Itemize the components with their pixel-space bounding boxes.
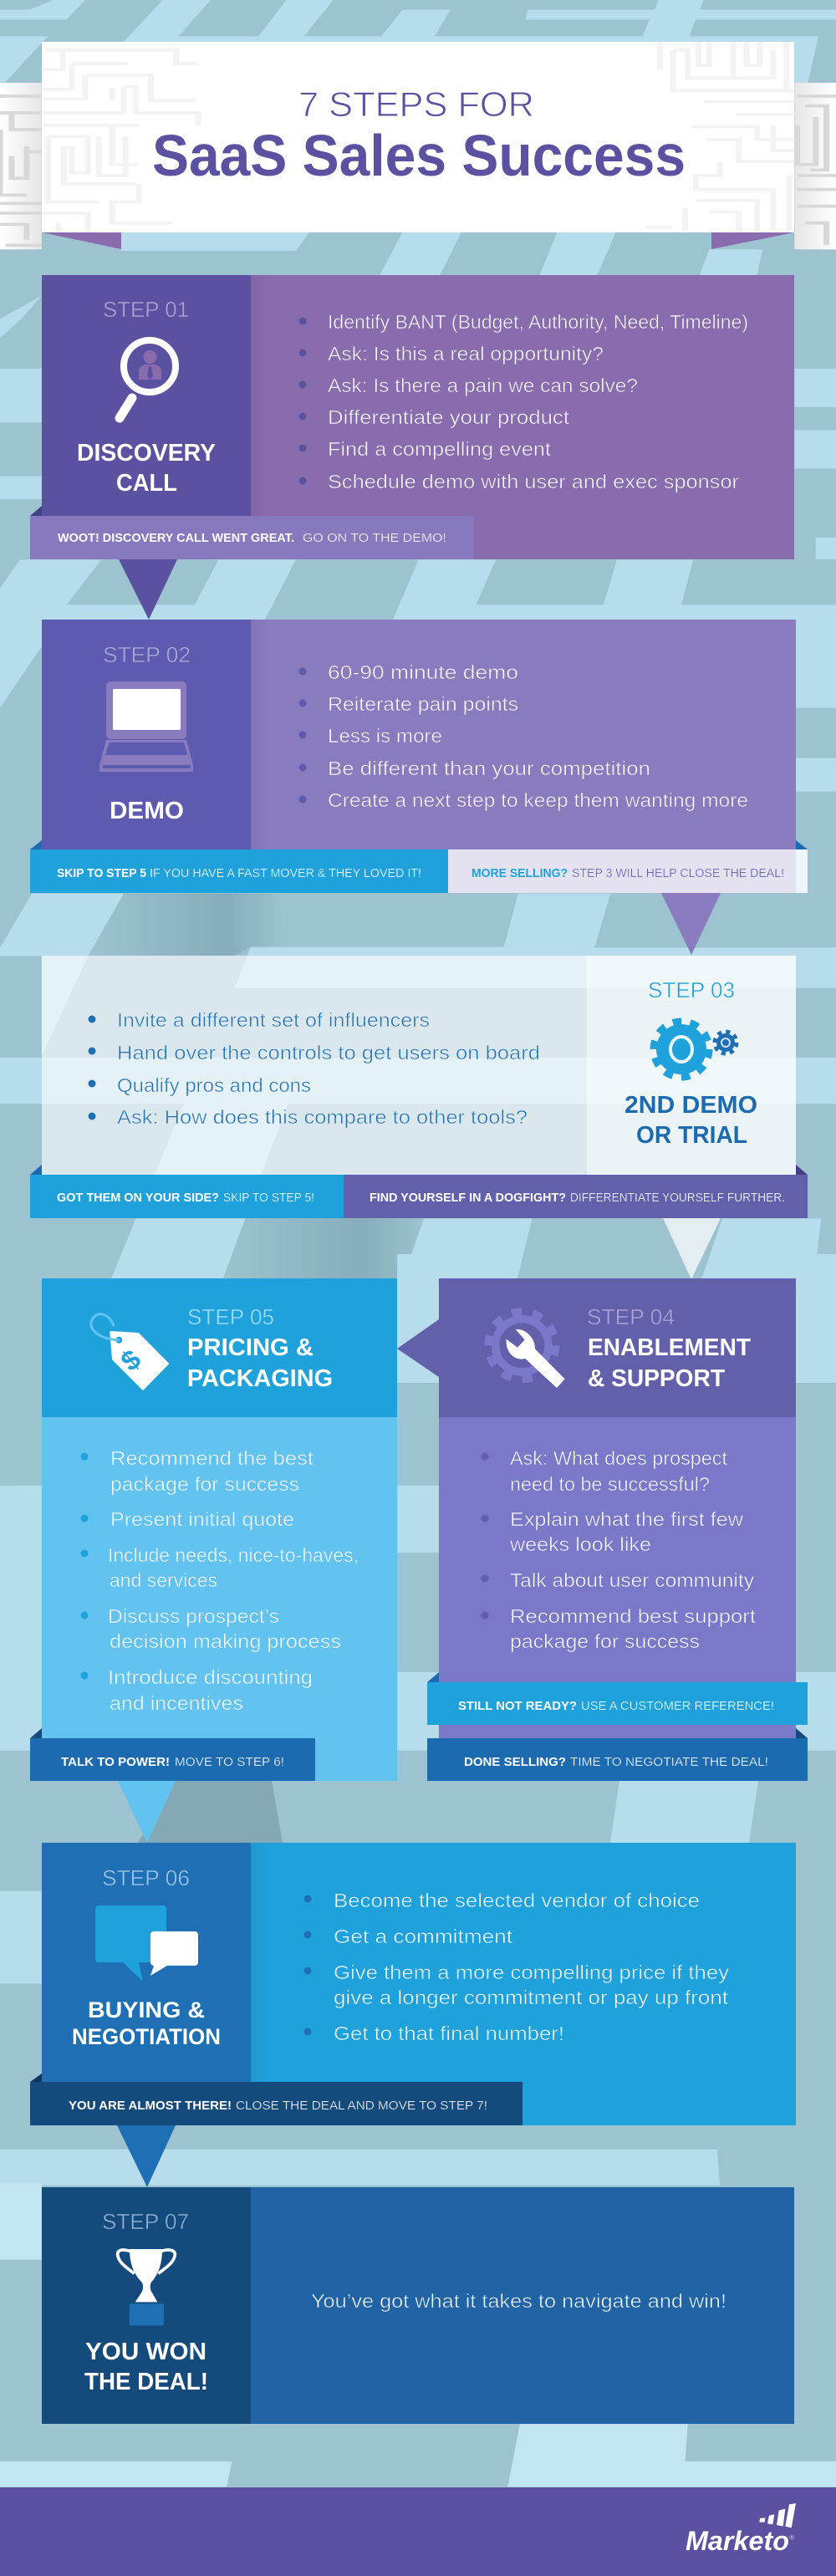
bullet list: Introduce discounting: [108, 1666, 313, 1688]
bullet list: Ask: How does this compare to other tools?: [117, 1106, 528, 1128]
arrow: step 4 to step 5: [397, 1319, 439, 1377]
bullet list: Find a compelling event: [328, 438, 552, 460]
bullet list: Explain what the first few: [510, 1508, 743, 1530]
bullet list: [299, 311, 748, 492]
banner: [30, 506, 474, 559]
logo: Marketo: Marketo: [686, 2526, 789, 2556]
heading: BUYING &: [88, 1997, 205, 2023]
header maze pattern: [42, 42, 794, 232]
closing text: You’ve got what it takes to navigate and win!: [311, 2290, 726, 2312]
banner: [30, 2074, 522, 2125]
banner: talk to power: TALK TO POWER!: [61, 1755, 170, 1769]
panel: step 06 buying and negotiation: [30, 1843, 796, 2125]
banner: got them on your side: GOT THEM ON YOUR SIDE?: [57, 1191, 219, 1205]
icon: price tag: $: [115, 1344, 147, 1378]
icon: magnifying glass with person: [120, 340, 176, 418]
banner: done selling: DONE SELLING?: [464, 1755, 566, 1769]
bullet list: 60-90 minute demo: [328, 661, 518, 683]
bullet list: Get to that final number!: [334, 2023, 564, 2044]
bullet list: and incentives: [110, 1692, 243, 1714]
region around steps 4 and 5: [0, 1254, 836, 1751]
heading: DEMO: [110, 798, 184, 824]
banner: talk to power: MOVE TO STEP 6!: [175, 1755, 284, 1769]
step label: STEP 05: [187, 1304, 274, 1329]
heading: PRICING &: [187, 1334, 314, 1361]
bullet list: [304, 1890, 730, 2044]
bullet list: [80, 1447, 359, 1714]
banner: still not ready: [427, 1672, 808, 1725]
ribbon fold left: [42, 232, 121, 249]
logo: Marketo: ®: [789, 2533, 794, 2541]
title line 1: 7 STEPS FOR: [298, 84, 534, 124]
step label: STEP 06: [102, 1865, 190, 1890]
bullet list: package for success: [510, 1630, 700, 1652]
icon: speech bubbles: [95, 1905, 198, 1982]
icon: wrench and gear: [488, 1312, 565, 1388]
banner: talk to power: [30, 1728, 315, 1781]
panel: step 04 enablement and support: [427, 1278, 808, 1781]
bullet list: Schedule demo with user and exec sponsor: [328, 471, 739, 492]
icon: laptop: [99, 681, 193, 772]
banner: skip to step 5: [30, 840, 448, 893]
step label: STEP 01: [103, 297, 189, 322]
step label: STEP 03: [648, 977, 735, 1002]
panel: step 05 pricing and packaging: [30, 1278, 397, 1781]
panel: step 01 discovery call: CALL: [116, 470, 177, 497]
bullet list: Less is more: [328, 725, 442, 747]
bullet list: Invite a different set of influencers: [117, 1009, 430, 1031]
banner: still not ready: USE A CUSTOMER REFERENCE!: [581, 1699, 774, 1713]
banner: more selling: [448, 840, 808, 893]
step label: STEP 02: [103, 642, 191, 667]
banner: done selling: TIME TO NEGOTIATE THE DEAL!: [570, 1755, 768, 1769]
bullet list: Recommend best support: [510, 1605, 757, 1627]
banner: done selling: [427, 1728, 808, 1781]
bullet list: [89, 1009, 540, 1128]
arrow: step 2 to step 3: [661, 893, 721, 955]
banner: more selling: MORE SELLING?: [472, 866, 568, 880]
panel: step 07 you won the deal: [42, 2187, 794, 2424]
step label: STEP 07: [102, 2209, 189, 2234]
bullet list: Differentiate your product: [328, 406, 570, 428]
panel: step 03 second demo or trial: [30, 956, 808, 1218]
banner: CLOSE THE DEAL AND MOVE TO STEP 7!: [236, 2099, 487, 2113]
arrow: step 1 to step 2: [119, 559, 177, 620]
bullet list: [482, 1447, 757, 1652]
banner: YOU ARE ALMOST THERE!: [69, 2099, 232, 2113]
banner: GO ON TO THE DEMO!: [303, 531, 446, 545]
bullet list: Include needs, nice-to-haves,: [108, 1544, 359, 1566]
banner: dogfight: FIND YOURSELF IN A DOGFIGHT?: [370, 1191, 566, 1205]
header panel: [42, 42, 794, 232]
panel: step 01 discovery call: [30, 275, 794, 559]
panel: step 02 demo: [30, 620, 808, 893]
banner: got them on your side: [30, 1165, 344, 1218]
bullet list: and services: [110, 1569, 217, 1591]
icon: trophy: [118, 2249, 175, 2325]
region around steps 6 and 7: [0, 1891, 836, 2487]
heading: DISCOVERY: [77, 440, 216, 467]
banner: still not ready: STILL NOT READY?: [458, 1699, 577, 1713]
bullet list: Recommend the best: [110, 1447, 314, 1469]
heading: 2ND DEMO: [624, 1092, 757, 1119]
arrow: step 6 to step 7: [117, 2125, 176, 2187]
logo: Marketo: [686, 2503, 796, 2556]
step label: STEP 04: [587, 1304, 675, 1329]
arrow: step 3 to step 4: [663, 1218, 721, 1279]
bullet list: [299, 661, 748, 811]
bullet list: Get a commitment: [334, 1926, 513, 1947]
banner: skip to step 5: SKIP TO STEP 5: [57, 866, 146, 880]
panel: step 04 enablement and support: & SUPPORT: [588, 1365, 725, 1392]
banner: WOOT! DISCOVERY CALL WENT GREAT.: [58, 531, 294, 545]
bullet list: Hand over the controls to get users on board: [117, 1042, 540, 1064]
panel: step 06 buying and negotiation: NEGOTIATION: [72, 2024, 221, 2049]
bullet list: Talk about user community: [510, 1569, 755, 1591]
bullet list: need to be successful?: [510, 1473, 710, 1495]
bullet list: Ask: Is this a real opportunity?: [328, 343, 604, 365]
bullet list: Ask: What does prospect: [510, 1447, 728, 1469]
bullet list: Qualify pros and cons: [117, 1074, 311, 1096]
bullet list: Reiterate pain points: [328, 693, 518, 715]
bullet list: Become the selected vendor of choice: [334, 1890, 700, 1911]
icon: price tag: [91, 1314, 168, 1390]
heading: ENABLEMENT: [588, 1334, 751, 1361]
banner: more selling: STEP 3 WILL HELP CLOSE THE DEAL!: [572, 866, 784, 880]
banner: skip to step 5: IF YOU HAVE A FAST MOVER & THEY LOVED IT!: [150, 866, 421, 880]
bullet list: decision making process: [110, 1630, 341, 1652]
region 660-1020 base light with darker wedges: [0, 552, 836, 847]
footer: [0, 2487, 836, 2576]
region around step 3: [0, 886, 836, 1288]
title line 2: SaaS Sales Success: [152, 123, 686, 188]
panel: step 03 second demo or trial: OR TRIAL: [636, 1122, 747, 1149]
bullet list: Ask: Is there a pain we can solve?: [328, 375, 638, 396]
header side ribbon left: [0, 83, 42, 249]
header side ribbon right: [794, 83, 836, 249]
panel: step 05 pricing and packaging: PACKAGING: [187, 1365, 333, 1392]
bullet list: give a longer commitment or pay up front: [334, 1987, 729, 2008]
ribbon fold right: [711, 232, 794, 249]
bullet list: Give them a more compelling price if they: [334, 1961, 730, 1983]
bullet list: Present initial quote: [110, 1508, 294, 1530]
banner: got them on your side: SKIP TO STEP 5!: [223, 1191, 314, 1205]
icon: gears: [655, 1023, 736, 1076]
panel: step 07 you won the deal: THE DEAL!: [84, 2369, 208, 2395]
bullet list: Create a next step to keep them wanting more: [328, 789, 748, 811]
banner: dogfight: [344, 1165, 808, 1218]
arrow: step 5 to step 6: [118, 1781, 176, 1843]
bullet list: Discuss prospect’s: [108, 1605, 279, 1627]
banner: dogfight: DIFFERENTIATE YOURSELF FURTHER.: [570, 1191, 785, 1205]
heading: YOU WON: [85, 2339, 206, 2365]
bullet list: package for success: [110, 1473, 299, 1495]
bullet list: weeks look like: [509, 1533, 651, 1555]
bullet list: Be different than your competition: [328, 757, 650, 779]
bullet list: Identify BANT (Budget, Authority, Need, Timeline): [328, 311, 748, 333]
